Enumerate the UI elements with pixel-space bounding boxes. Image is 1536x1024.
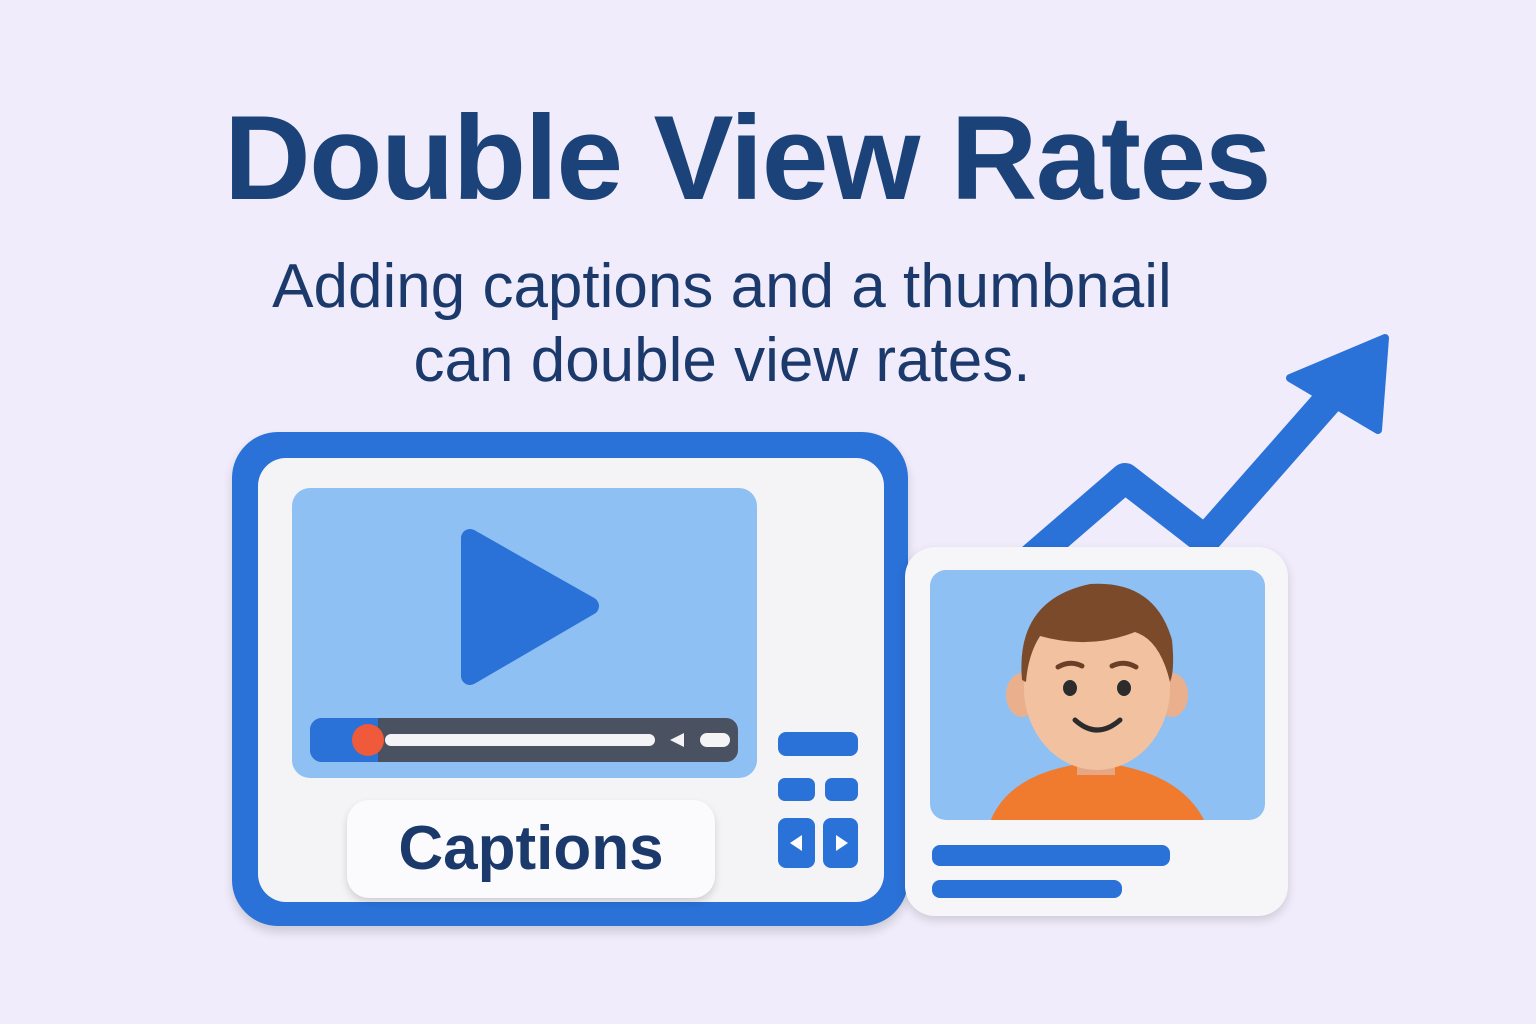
panel: thumbnail card — [905, 547, 1288, 916]
subtitle: Adding captions and a thumbnail — [272, 252, 1172, 321]
captions button: Captions — [398, 814, 664, 883]
thumbnail image with person — [930, 570, 1265, 820]
captions button — [347, 800, 715, 898]
side controls — [778, 732, 858, 868]
subtitle — [272, 252, 1172, 395]
video screen — [292, 488, 757, 778]
subtitle: can double view rates. — [414, 326, 1030, 395]
icon: play button — [461, 529, 599, 685]
title: Double View Rates — [224, 91, 1270, 225]
text lines — [932, 845, 1170, 866]
panel: video player — [232, 432, 908, 926]
player inner body — [258, 458, 884, 902]
progress bar — [310, 718, 738, 762]
